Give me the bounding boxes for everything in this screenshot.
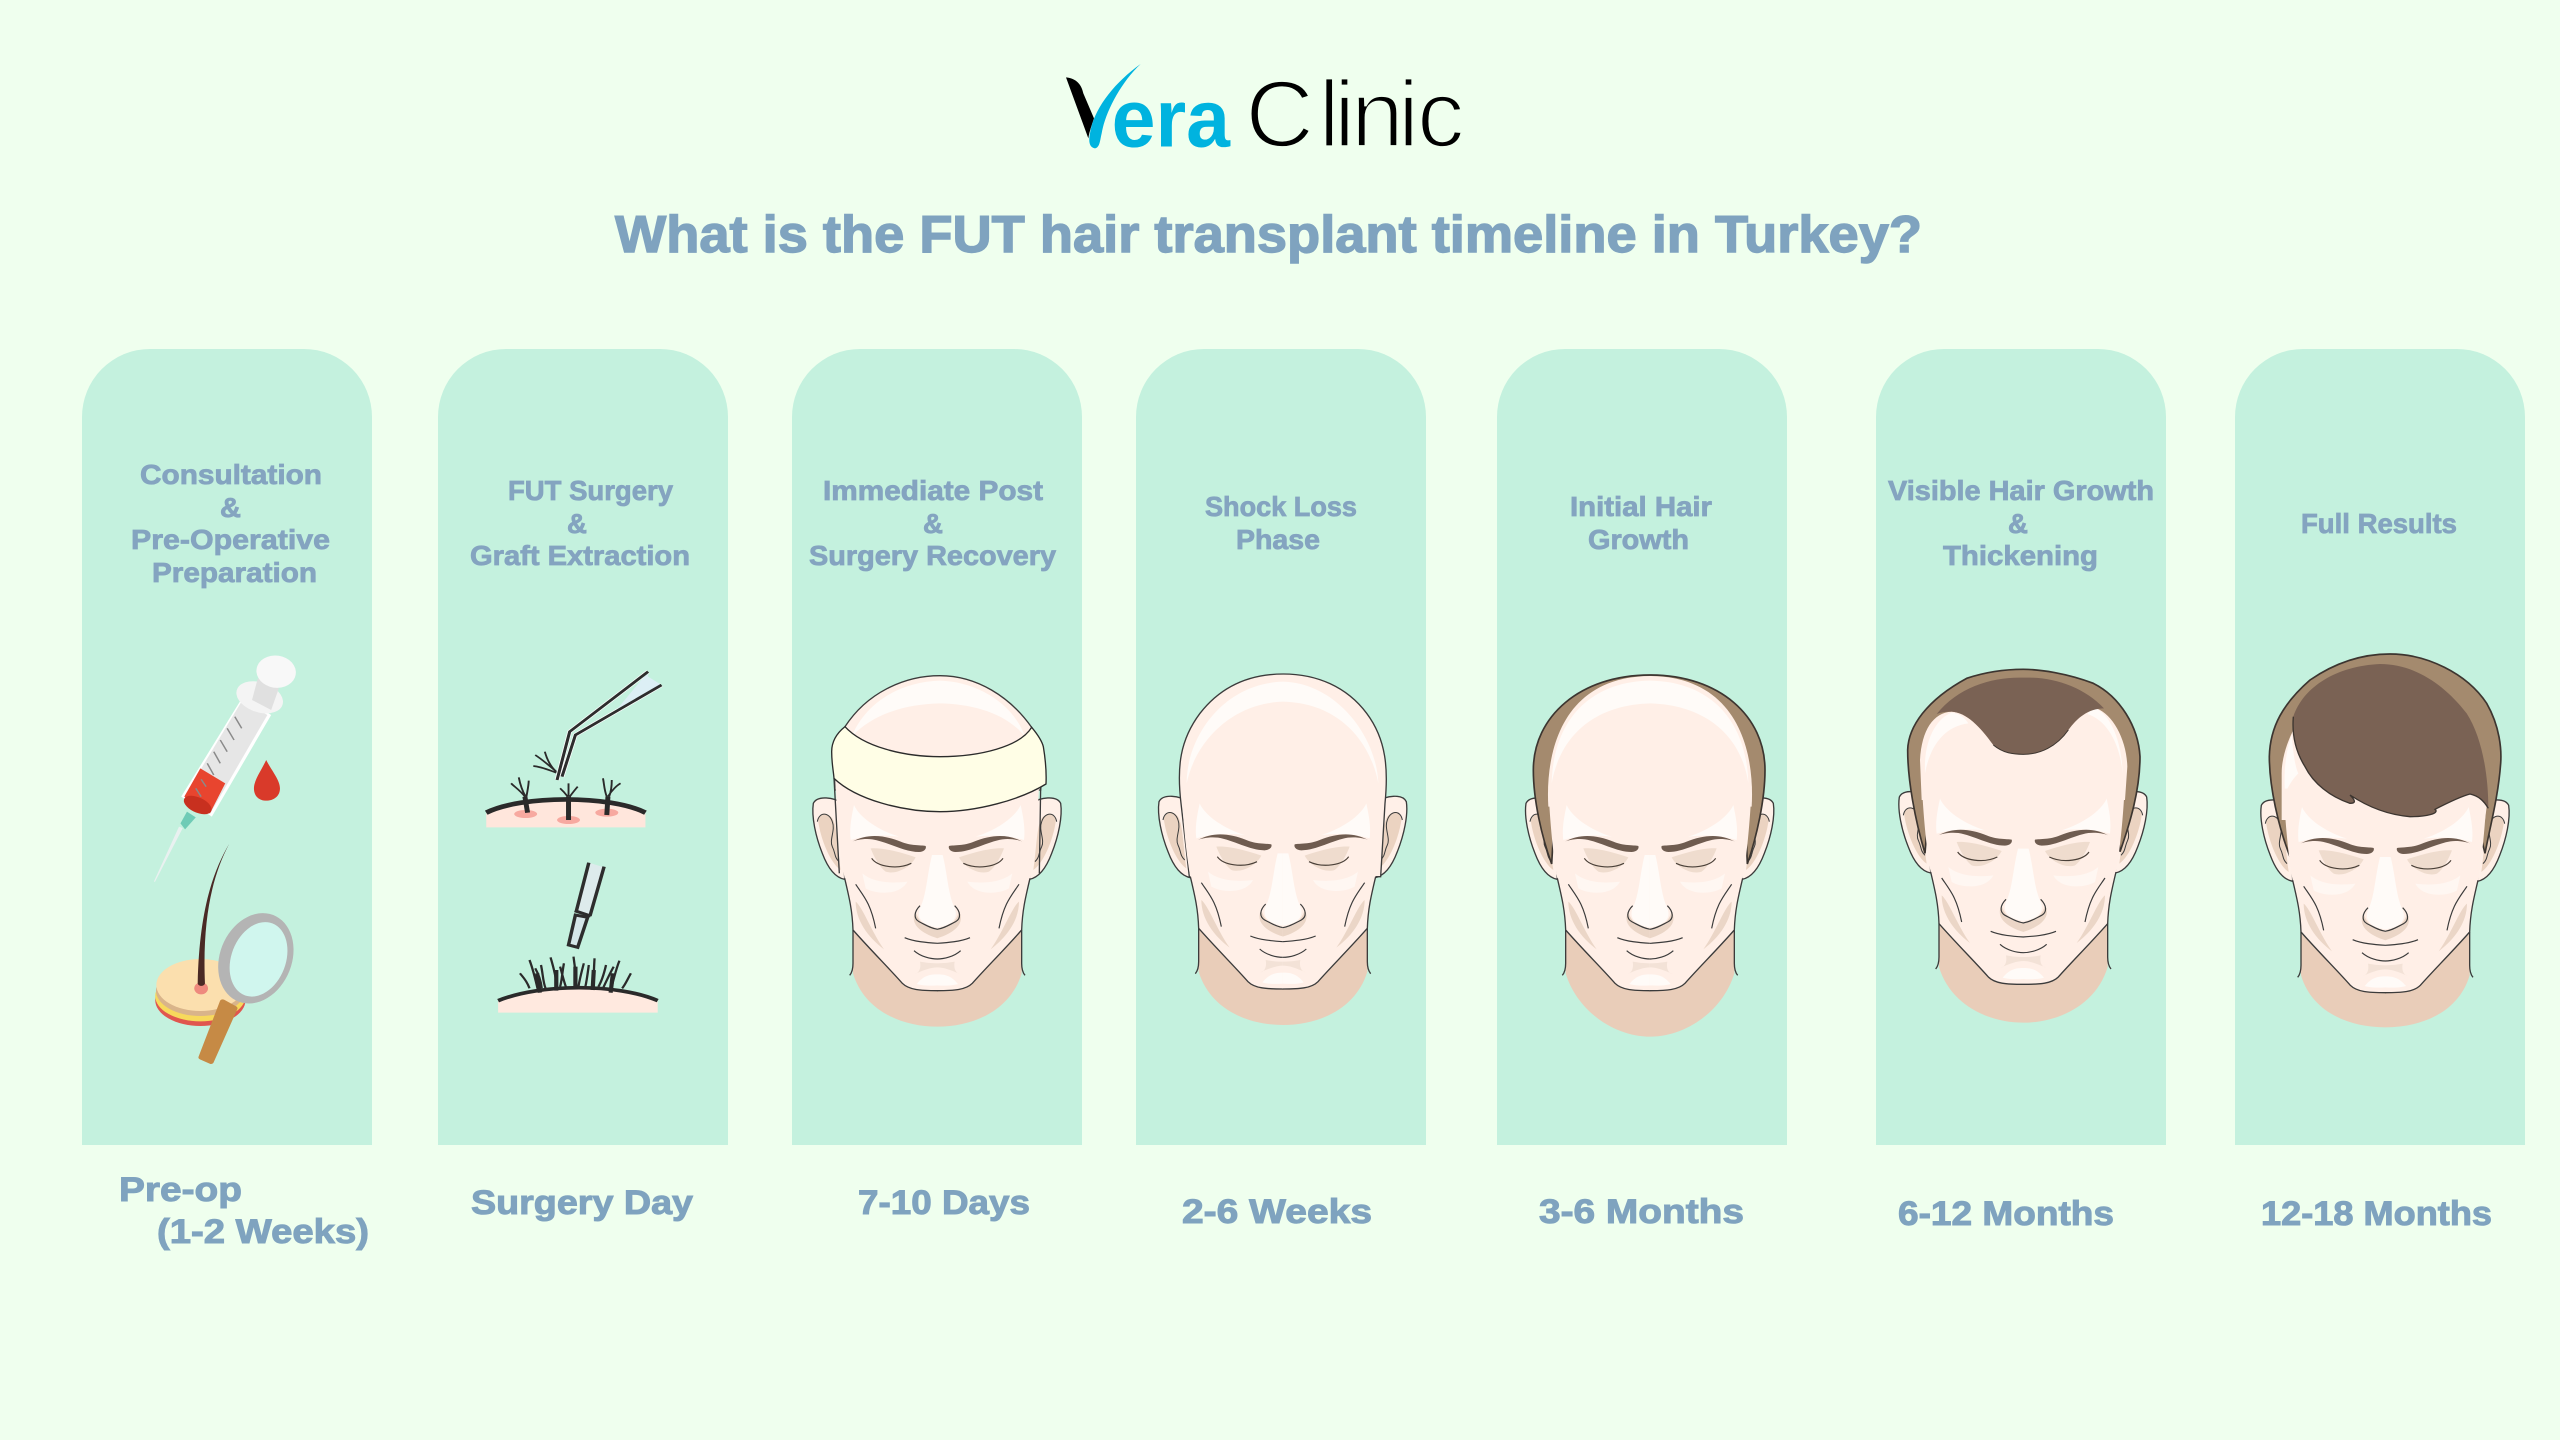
- panel background: [2235, 349, 2525, 1145]
- panel heading: Initial Hair: [1570, 491, 1712, 522]
- icon: V mark black stroke: [1066, 77, 1094, 138]
- title: What is the FUT hair transplant timeline in Turkey?: [615, 206, 1922, 264]
- icon: punch tool over hair: [498, 863, 658, 1013]
- panel heading: &: [2008, 508, 2028, 539]
- panel heading: Consultation: [140, 459, 322, 490]
- panel background: [1497, 349, 1787, 1145]
- duration: [119, 1171, 369, 1251]
- panel: 7-10 days: [792, 349, 1082, 1222]
- head: full results: [2261, 654, 2509, 1027]
- logo word: Clinic: Clinic: [1245, 62, 1464, 168]
- panel heading: &: [567, 508, 587, 539]
- panel: pre-op: [82, 349, 372, 1251]
- panel heading: [1205, 491, 1357, 555]
- duration: 7-10 Days: [858, 1184, 1030, 1222]
- icon: tweezers extracting graft: [486, 672, 662, 827]
- duration: 2-6 Weeks: [1182, 1193, 1372, 1231]
- panel heading: &: [220, 492, 241, 523]
- panel: 2-6 weeks: [1136, 349, 1426, 1231]
- panel heading: FUT Surgery: [508, 475, 673, 506]
- panel heading: Graft Extraction: [470, 540, 690, 571]
- head: initial hair growth: [1526, 675, 1774, 1037]
- panel heading: Surgery Recovery: [809, 540, 1056, 571]
- panel heading: Preparation: [152, 557, 317, 588]
- panel heading: [1888, 475, 2154, 571]
- duration: 12-18 Months: [2261, 1195, 2492, 1233]
- panel heading: [131, 459, 330, 588]
- head: visible hair growth: [1899, 669, 2147, 1023]
- panel background: [1876, 349, 2166, 1145]
- panel heading: [470, 475, 690, 571]
- panel background: [792, 349, 1082, 1145]
- panel: 6-12 months: [1876, 349, 2166, 1233]
- panel heading: [1570, 491, 1712, 555]
- logo word: era: era: [1112, 74, 1231, 165]
- icon: V mark blue swoosh: [1089, 64, 1141, 148]
- panel heading: Pre-Operative: [131, 524, 330, 555]
- panel heading: &: [923, 508, 943, 539]
- duration: Pre-op: [119, 1171, 242, 1209]
- duration: 3-6 Months: [1539, 1193, 1744, 1231]
- panel heading: Growth: [1588, 524, 1689, 555]
- panel: 3-6 months: [1497, 349, 1787, 1231]
- icon: syringe and blood drop: [154, 651, 301, 882]
- head: bandaged: [813, 676, 1061, 1027]
- panel heading: Thickening: [1943, 540, 2098, 571]
- panel heading: Immediate Post: [823, 475, 1043, 506]
- panel background: [438, 349, 728, 1145]
- panel: surgery day: [438, 349, 728, 1222]
- duration: Surgery Day: [471, 1184, 693, 1222]
- panel heading: [809, 475, 1056, 571]
- head: bald, shock loss: [1159, 674, 1407, 1025]
- panel heading: Shock Loss: [1205, 491, 1357, 522]
- panel background: [82, 349, 372, 1145]
- panel background: [1136, 349, 1426, 1145]
- icon: hair follicle with magnifying glass: [155, 844, 305, 1062]
- panel heading: Visible Hair Growth: [1888, 475, 2154, 506]
- duration: (1-2 Weeks): [157, 1213, 369, 1251]
- panel heading: Full Results: [2301, 508, 2457, 539]
- panel: 12-18 months: [2235, 349, 2525, 1233]
- duration: 6-12 Months: [1898, 1195, 2114, 1233]
- panel heading: Phase: [1236, 524, 1320, 555]
- logo: Vera Clinic: [1066, 62, 1464, 168]
